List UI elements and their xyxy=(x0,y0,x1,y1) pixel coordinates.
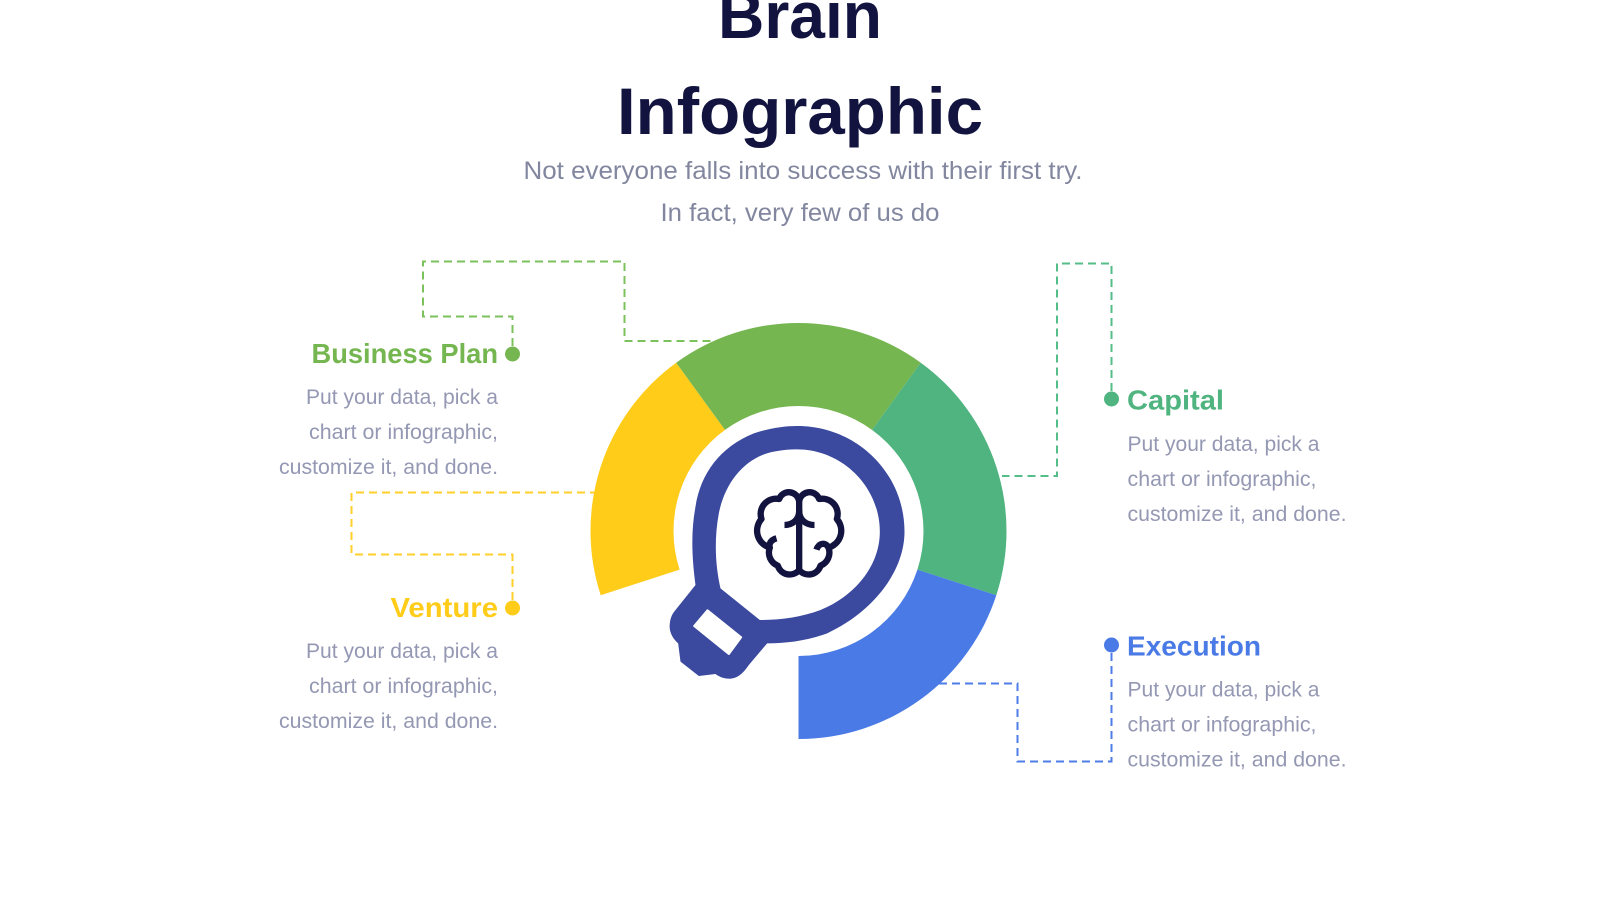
donut chart xyxy=(590,323,1007,739)
body text xyxy=(279,385,498,479)
body text: chart or infographic, xyxy=(309,420,498,444)
heading: Execution xyxy=(1127,630,1261,662)
segment: business plan xyxy=(676,323,921,430)
body text: customize it, and done. xyxy=(1128,502,1346,526)
segment: venture xyxy=(590,363,725,595)
body text: customize it, and done. xyxy=(279,709,498,733)
body text: Put your data, pick a xyxy=(1128,678,1320,702)
subtitle: Not everyone falls into success with their first try. xyxy=(524,157,1082,185)
connector: venture xyxy=(352,492,594,600)
body text: chart or infographic, xyxy=(1128,467,1316,491)
connector: capital xyxy=(1002,264,1112,476)
heading: Business Plan xyxy=(312,338,498,369)
body text xyxy=(279,639,498,733)
icon: light bulb xyxy=(670,426,904,679)
body text: Put your data, pick a xyxy=(306,385,498,409)
body text: Put your data, pick a xyxy=(306,639,498,663)
marker dot xyxy=(505,600,520,616)
marker dot xyxy=(1104,638,1119,652)
label: capital xyxy=(1104,384,1346,526)
body text: Put your data, pick a xyxy=(1128,432,1320,456)
marker dot xyxy=(505,346,520,362)
segment: execution xyxy=(798,570,996,739)
title xyxy=(617,0,983,148)
segment: capital xyxy=(872,363,1007,595)
heading: Capital xyxy=(1127,384,1224,416)
body text xyxy=(1128,432,1346,526)
connector: business plan xyxy=(423,262,717,346)
body text: chart or infographic, xyxy=(309,674,498,698)
body text xyxy=(1128,678,1346,772)
body text: customize it, and done. xyxy=(1128,748,1346,772)
label: execution xyxy=(1104,630,1346,772)
connector: execution xyxy=(938,653,1112,762)
subtitle: In fact, very few of us do xyxy=(660,199,940,227)
label: venture xyxy=(279,592,520,733)
body text: chart or infographic, xyxy=(1128,712,1316,736)
subtitle xyxy=(524,157,1082,227)
body text: customize it, and done. xyxy=(279,455,498,479)
marker dot xyxy=(1104,392,1119,406)
heading: Venture xyxy=(390,592,498,623)
title: Infographic xyxy=(617,74,983,148)
icon: brain xyxy=(757,492,841,574)
label: business plan xyxy=(279,338,520,479)
